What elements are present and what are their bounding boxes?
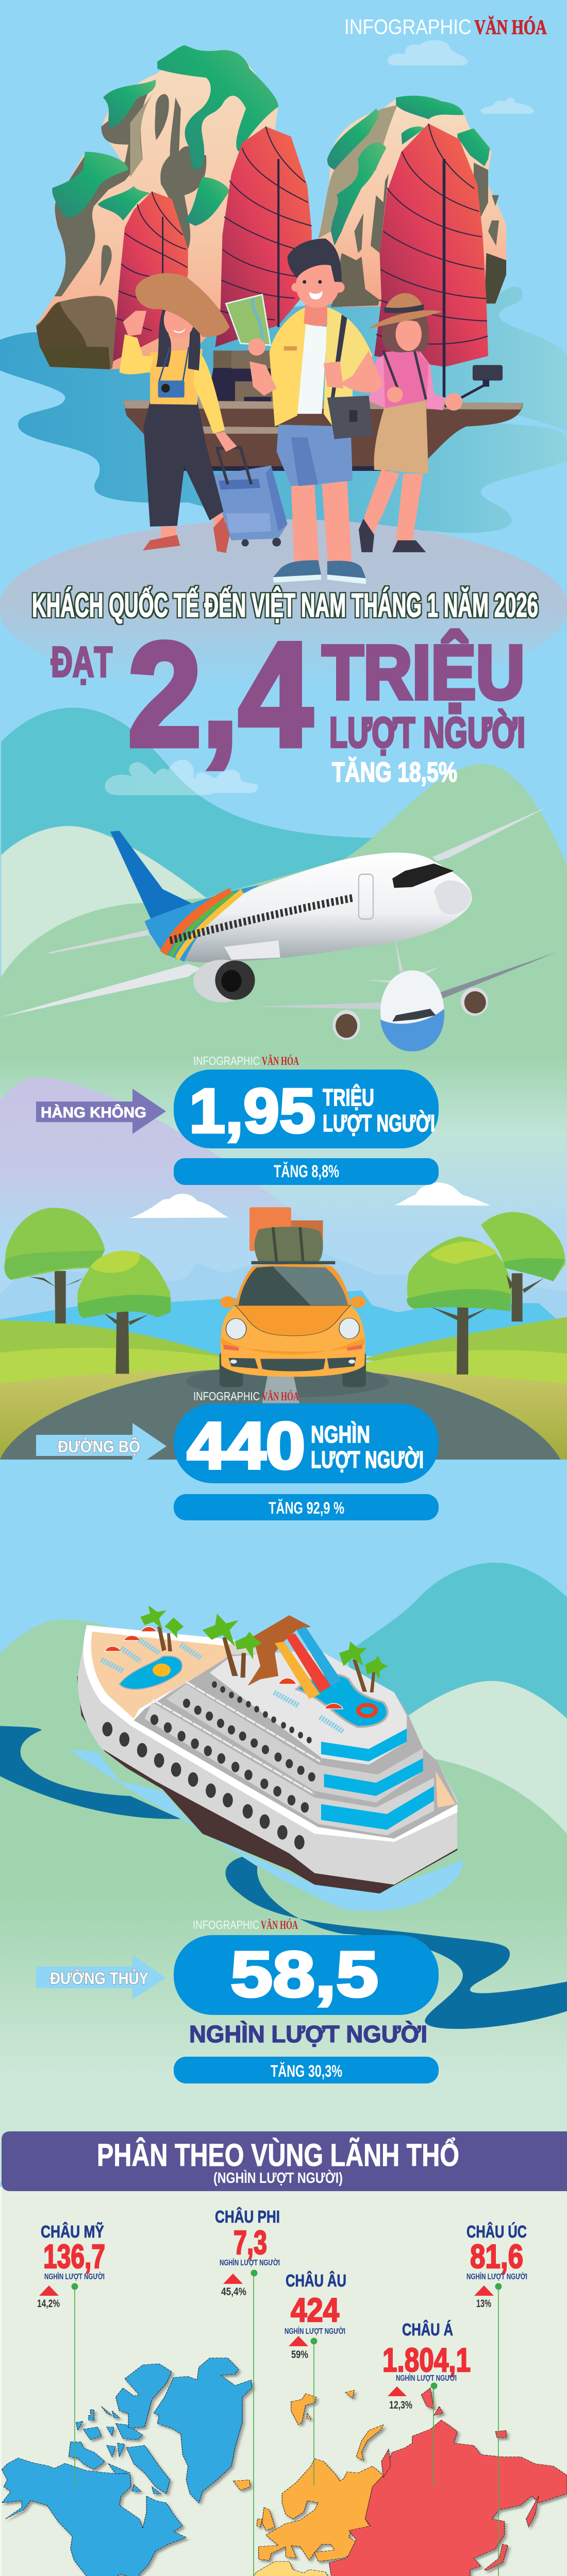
callout: Asia: CHÂU Á (402, 2320, 453, 2339)
sky behind road section (0, 1234, 567, 1463)
world map (2, 2358, 567, 2576)
second airplane (253, 938, 556, 1052)
Europe (233, 2390, 383, 2562)
arrow label: duong bo (36, 1423, 166, 1469)
watermark air: INFOGRAPHIC (193, 1054, 260, 1067)
callout: Americas (37, 2222, 105, 2486)
watermark waterway: INFOGRAPHIC (193, 1918, 259, 1931)
foliage left rock (157, 45, 278, 170)
pale clouds (105, 760, 258, 795)
cruise ship (77, 1605, 457, 1893)
number 2,4: 2,4 (128, 612, 313, 777)
growth pill 8,8%: TĂNG 8,8% (274, 1162, 339, 1181)
lower sky below the road (0, 1460, 567, 1599)
railings (153, 1682, 320, 1793)
section heading: by region (2, 2131, 567, 2191)
callout: Asia (382, 2320, 471, 2486)
water slides (275, 1641, 320, 1699)
value pill 1,95: 1,95 (189, 1076, 315, 1146)
umbrellas (105, 1626, 343, 1709)
callout: Americas: 14,2% (37, 2298, 60, 2310)
unit text below pill: NGHÌN LƯỢT NGƯỜI (189, 2021, 427, 2047)
callout: Europe: 59% (291, 2349, 308, 2361)
teal hill (1, 708, 373, 994)
callout: Europe: CHÂU ÂU (286, 2271, 346, 2290)
nose shade (434, 880, 472, 914)
value pill 440: NGHÌN (311, 1421, 370, 1448)
green hill main (0, 764, 567, 1236)
front green hills (0, 1348, 567, 1388)
section heading: by region: PHÂN THEO VÙNG LÃNH THỔ (97, 2137, 459, 2173)
sun loungers (101, 1640, 343, 1732)
value pill 58,5 (174, 1935, 439, 2015)
lower level (145, 1702, 434, 1835)
callout: Americas: CHÂU MỸ (41, 2222, 104, 2241)
tree far left (5, 1208, 105, 1324)
rainbow livery (145, 885, 260, 962)
arrow label: duong thuy: ĐƯỜNG THỦY (50, 1969, 148, 1988)
portholes (103, 1681, 315, 1850)
grille (228, 1357, 356, 1371)
water slide tower (248, 1615, 311, 1686)
three tourists group (119, 239, 503, 584)
watermark road: INFOGRAPHIC (193, 1389, 260, 1403)
arrow label: hang khong: HÀNG KHÔNG (41, 1104, 146, 1121)
trees (5, 1208, 565, 1375)
callout: Europe (285, 2271, 346, 2486)
tail fin (110, 831, 193, 921)
watermark road: VĂN HÓA (262, 1389, 299, 1403)
callout: Oceania: 81,6 (470, 2238, 523, 2275)
watermark air: VĂN HÓA (262, 1054, 299, 1067)
water of the bay (0, 286, 567, 533)
cloud right top (388, 40, 468, 65)
door (359, 874, 373, 919)
panel: road transport (36, 1403, 439, 1520)
word DAT: ĐẠT (51, 638, 112, 686)
deck base (134, 1653, 457, 1839)
car with luggage (220, 1207, 366, 1387)
ship wake water (69, 1750, 463, 1911)
tourist: woman in big hat with camera and suitcase (119, 273, 288, 553)
cockpit windows (392, 863, 454, 888)
body (221, 1306, 365, 1377)
callout: Africa: CHÂU PHI (215, 2207, 280, 2226)
callout: Africa: NGHÌN LƯỢT NGƯỜI (220, 2258, 280, 2267)
illustration: two airplanes (0, 806, 556, 1052)
callout: Asia: NGHÌN LƯỢT NGƯỜI (396, 2373, 457, 2383)
red junk sails (113, 124, 488, 398)
value pill 1,95 (174, 1070, 439, 1148)
callout: Africa: 7,3 (234, 2224, 267, 2261)
top deck (210, 1650, 407, 1765)
roof (235, 1264, 351, 1306)
callout: Oceania: 13% (476, 2298, 491, 2310)
callout: Europe: NGHÌN LƯỢT NGƯỜI (285, 2326, 345, 2336)
callout: Europe: 424 (291, 2291, 339, 2329)
tree right near (407, 1236, 512, 1375)
mountains front (0, 1291, 567, 1356)
tree right far (481, 1212, 565, 1321)
pale hill left (1, 826, 206, 1037)
Africa (246, 2562, 356, 2576)
pale hill (409, 1681, 567, 1847)
back green hills (0, 1317, 567, 1384)
arrow label: duong thuy (36, 1955, 166, 1999)
Greenland (154, 2358, 252, 2503)
road (0, 1369, 560, 1460)
mountains back (0, 1251, 567, 1333)
growth pill 30,3%: TĂNG 30,3% (271, 2062, 342, 2080)
callout: Americas: NGHÌN LƯỢT NGƯỜI (44, 2272, 105, 2281)
tourist: man in yellow shirt (226, 239, 382, 584)
white clouds lower (129, 1182, 491, 1218)
Asia (329, 2388, 567, 2576)
callout: Africa (215, 2207, 280, 2576)
value pill 58,5: 58,5 (230, 1939, 378, 2010)
hero illustration: Ha Long bay, junk boat and three tourists (0, 15, 567, 697)
tourist: woman with selfie stick (359, 293, 503, 552)
rock grey shading (54, 87, 152, 296)
passenger windows (170, 897, 354, 940)
grey ground ellipse under the tourists (0, 519, 567, 697)
mirrors (220, 1296, 236, 1308)
callout: Asia: 1.804,1 (382, 2341, 471, 2379)
palm trees (140, 1605, 388, 1692)
teal hill (347, 1563, 567, 1761)
hills and river behind waterway section (0, 1563, 567, 2112)
panel: map background (2, 2164, 567, 2576)
callout: Asia: 12,3% (389, 2399, 412, 2411)
tail stabiliser (49, 930, 149, 954)
red lights (224, 1345, 362, 1351)
panel: air transport (36, 1070, 439, 1185)
watermark waterway: VĂN HÓA (261, 1918, 298, 1931)
swimming pool left (119, 1656, 182, 1689)
landscape hills behind air travel section (0, 708, 567, 1236)
growth note 18,5%: TĂNG 18,5% (332, 757, 457, 788)
value pill 440: LƯỢT NGƯỜI (311, 1446, 424, 1473)
section heading: by region: (NGHÌN LƯỢT NGƯỜI) (213, 2169, 343, 2187)
value pill 1,95: TRIỆU (323, 1084, 374, 1111)
wheels (220, 1351, 243, 1387)
junk boat hull and cabin (123, 350, 523, 471)
road centre dash (262, 1376, 299, 1403)
callout: Americas: 136,7 (43, 2238, 105, 2275)
hull bottom (77, 1676, 457, 1893)
white rim (84, 1625, 457, 1842)
limestone rock right (318, 96, 506, 307)
growth pill 30,3% (174, 2057, 439, 2083)
North America and Arctic Canada (2, 2358, 252, 2576)
sun deck sand (91, 1632, 231, 1719)
word TRIEU: TRIỆU (322, 630, 525, 715)
green hill front (0, 1619, 567, 2112)
river (0, 1726, 567, 2029)
foliage right rock (396, 96, 463, 119)
road shoulders (0, 1369, 567, 1460)
value pill 1,95: LƯỢT NGƯỜI (323, 1110, 435, 1137)
float ring (358, 1705, 376, 1716)
near wing (0, 964, 201, 1018)
limestone rock left (36, 45, 278, 369)
growth pill 8,8% (174, 1158, 439, 1185)
headline number: 2,4 million visitors (51, 612, 525, 777)
far wing (432, 806, 549, 861)
value pill 440 (174, 1403, 439, 1483)
sail battens and masts (115, 124, 488, 398)
callout: Oceania: CHÂU ÚC (466, 2222, 527, 2241)
cloud small (481, 97, 534, 114)
logo top right: INFOGRAPHIC (344, 15, 472, 39)
growth pill 92,9%: TĂNG 92,9 % (269, 1499, 344, 1517)
middle level (166, 1684, 423, 1803)
arrow label: hang khong (36, 1089, 166, 1134)
purple hill (0, 1077, 325, 1236)
arrow label: duong bo: ĐƯỜNG BỘ (58, 1437, 140, 1456)
hull side (78, 1625, 457, 1885)
strip above map section (0, 2105, 567, 2182)
callout: Oceania (466, 2222, 527, 2576)
panel: waterway transport (36, 1935, 439, 2083)
swimming pool right (296, 1674, 388, 1727)
left edge of map section (0, 2187, 2, 2576)
illustration: road with car and trees (0, 1207, 567, 1460)
engine (193, 960, 255, 1003)
luggage on the roof (249, 1207, 291, 1251)
headlights (226, 1318, 246, 1340)
growth pill 92,9% (174, 1494, 439, 1520)
value pill 440: 440 (187, 1409, 305, 1483)
callout: Africa: 45,4% (221, 2286, 246, 2298)
glass bands (321, 1728, 434, 1830)
tree near left (77, 1251, 171, 1374)
callout: Oceania: NGHÌN LƯỢT NGƯỜI (466, 2272, 527, 2281)
road shadow under car (186, 1365, 389, 1397)
fuselage (146, 853, 472, 962)
